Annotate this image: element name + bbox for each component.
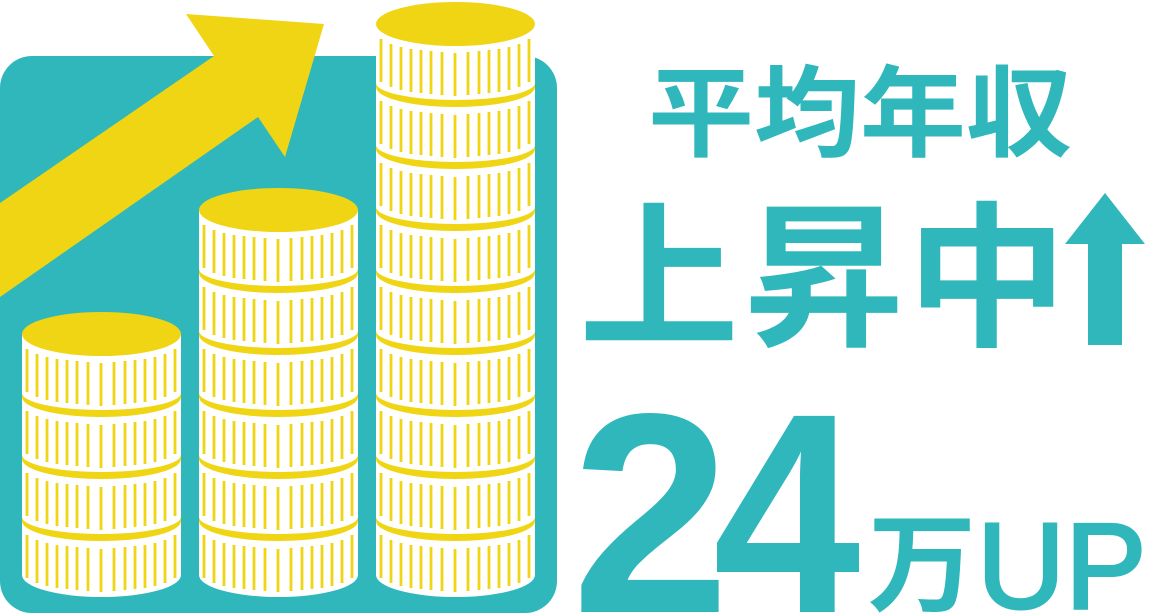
icon: up arrow bbox=[1065, 193, 1145, 345]
background panel bbox=[0, 56, 557, 613]
heading: average annual income: 平均年収 bbox=[648, 59, 1072, 170]
coin stack: medium bbox=[199, 188, 358, 597]
coin stack: short bbox=[22, 312, 181, 597]
figure: 24 bbox=[572, 355, 860, 613]
rising arrow bbox=[0, 14, 324, 297]
coin stack: tall bbox=[376, 2, 535, 597]
heading: rising: 上昇中 bbox=[579, 192, 1067, 368]
